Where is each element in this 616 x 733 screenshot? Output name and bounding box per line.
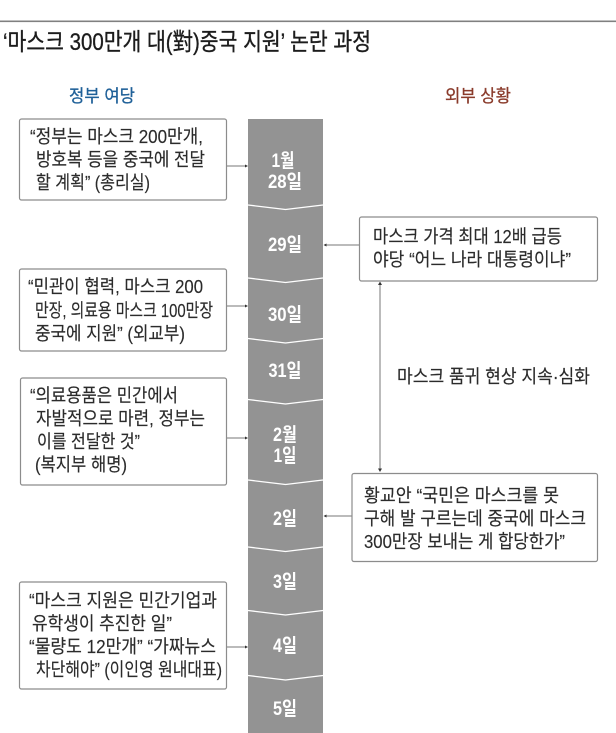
panel: mask price surge: 야당 “어느 나라 대통령이냐” bbox=[373, 249, 571, 270]
title: ‘마스크 300만개 대(對)중국 지원’ 논란 과정 bbox=[3, 29, 371, 56]
panel: Health Ministry explanation: 이를 전달한 것” bbox=[37, 431, 140, 452]
panel: Health Ministry explanation: 자발적으로 마련, 정부는 bbox=[36, 408, 205, 429]
date: 31: 31일 bbox=[268, 360, 302, 382]
date: 3: 3일 bbox=[273, 571, 297, 593]
panel: Hwang Kyo-ahn statement: 구해 발 구르는데 중국에 마스크 bbox=[364, 508, 586, 529]
connector: box 3 to column bbox=[226, 436, 248, 440]
double arrow: shortage continues bbox=[378, 282, 382, 472]
panel: Prime Minister's office statement: “정부는 마스크 200만개, bbox=[30, 126, 203, 147]
date: February 1 bbox=[273, 424, 297, 467]
panel: Health Ministry explanation bbox=[20, 378, 226, 485]
panel: mask price surge bbox=[360, 217, 598, 281]
panel: Hwang Kyo-ahn statement: 300만장 보내는 게 합당한가” bbox=[364, 531, 565, 552]
label: mask shortage continues and worsens: 마스크 품귀 현상 지속·심화 bbox=[397, 366, 590, 387]
connector: right box 1 to column bbox=[324, 244, 359, 246]
panel: Prime Minister's office statement: 방호복 등을 중국에 전달 bbox=[36, 149, 205, 170]
date: 29: 29일 bbox=[268, 234, 302, 256]
panel: floor leader statement bbox=[20, 582, 226, 689]
heading: government and ruling party: 정부 여당 bbox=[69, 86, 135, 106]
panel: floor leader statement: 차단해야” (이인영 원내대표) bbox=[36, 659, 222, 680]
panel: Health Ministry explanation: “의료용품은 민간에서 bbox=[30, 385, 178, 406]
date: 5: 5일 bbox=[273, 698, 297, 720]
panel: Foreign Ministry statement: “민관이 협력, 마스크 200 bbox=[28, 276, 203, 297]
panel: floor leader statement: “물량도 12만개” “가짜뉴스 bbox=[29, 636, 216, 657]
panel: floor leader statement: “마스크 지원은 민간기업과 bbox=[29, 590, 217, 611]
panel: Hwang Kyo-ahn statement: 황교안 “국민은 마스크를 못 bbox=[364, 485, 559, 506]
panel: Hwang Kyo-ahn statement bbox=[352, 474, 598, 562]
date: 4: 4일 bbox=[273, 635, 297, 657]
date: February 1: 2월 bbox=[273, 424, 297, 446]
panel: Health Ministry explanation: (복지부 해명) bbox=[35, 454, 127, 475]
connector: right box 2 to column bbox=[324, 514, 352, 518]
date: January 28: 28일 bbox=[268, 171, 302, 193]
date: 2: 2일 bbox=[273, 508, 297, 530]
date: 30: 30일 bbox=[268, 304, 302, 326]
panel: Foreign Ministry statement: 중국에 지원” (외교부) bbox=[35, 323, 185, 344]
panel: mask price surge: 마스크 가격 최대 12배 급등 bbox=[373, 226, 562, 247]
panel: floor leader statement: 유학생이 추진한 일” bbox=[32, 613, 172, 634]
date: January 28 bbox=[268, 150, 302, 193]
date: January 28: 1월 bbox=[272, 150, 294, 172]
panel: Prime Minister's office statement: 할 계획” (총리실) bbox=[36, 172, 150, 193]
panel: Foreign Ministry statement bbox=[20, 269, 226, 351]
date: February 1: 1일 bbox=[274, 445, 296, 467]
timeline column bbox=[248, 119, 323, 733]
connector: box 4 to column bbox=[226, 646, 248, 648]
heading: external situation: 외부 상황 bbox=[445, 86, 511, 106]
connector: box 1 to column bbox=[226, 164, 248, 168]
panel: Prime Minister's office statement bbox=[20, 119, 226, 200]
panel: Foreign Ministry statement: 만장, 의료용 마스크 100만장 bbox=[35, 300, 213, 321]
connector: box 2 to column bbox=[226, 304, 248, 308]
